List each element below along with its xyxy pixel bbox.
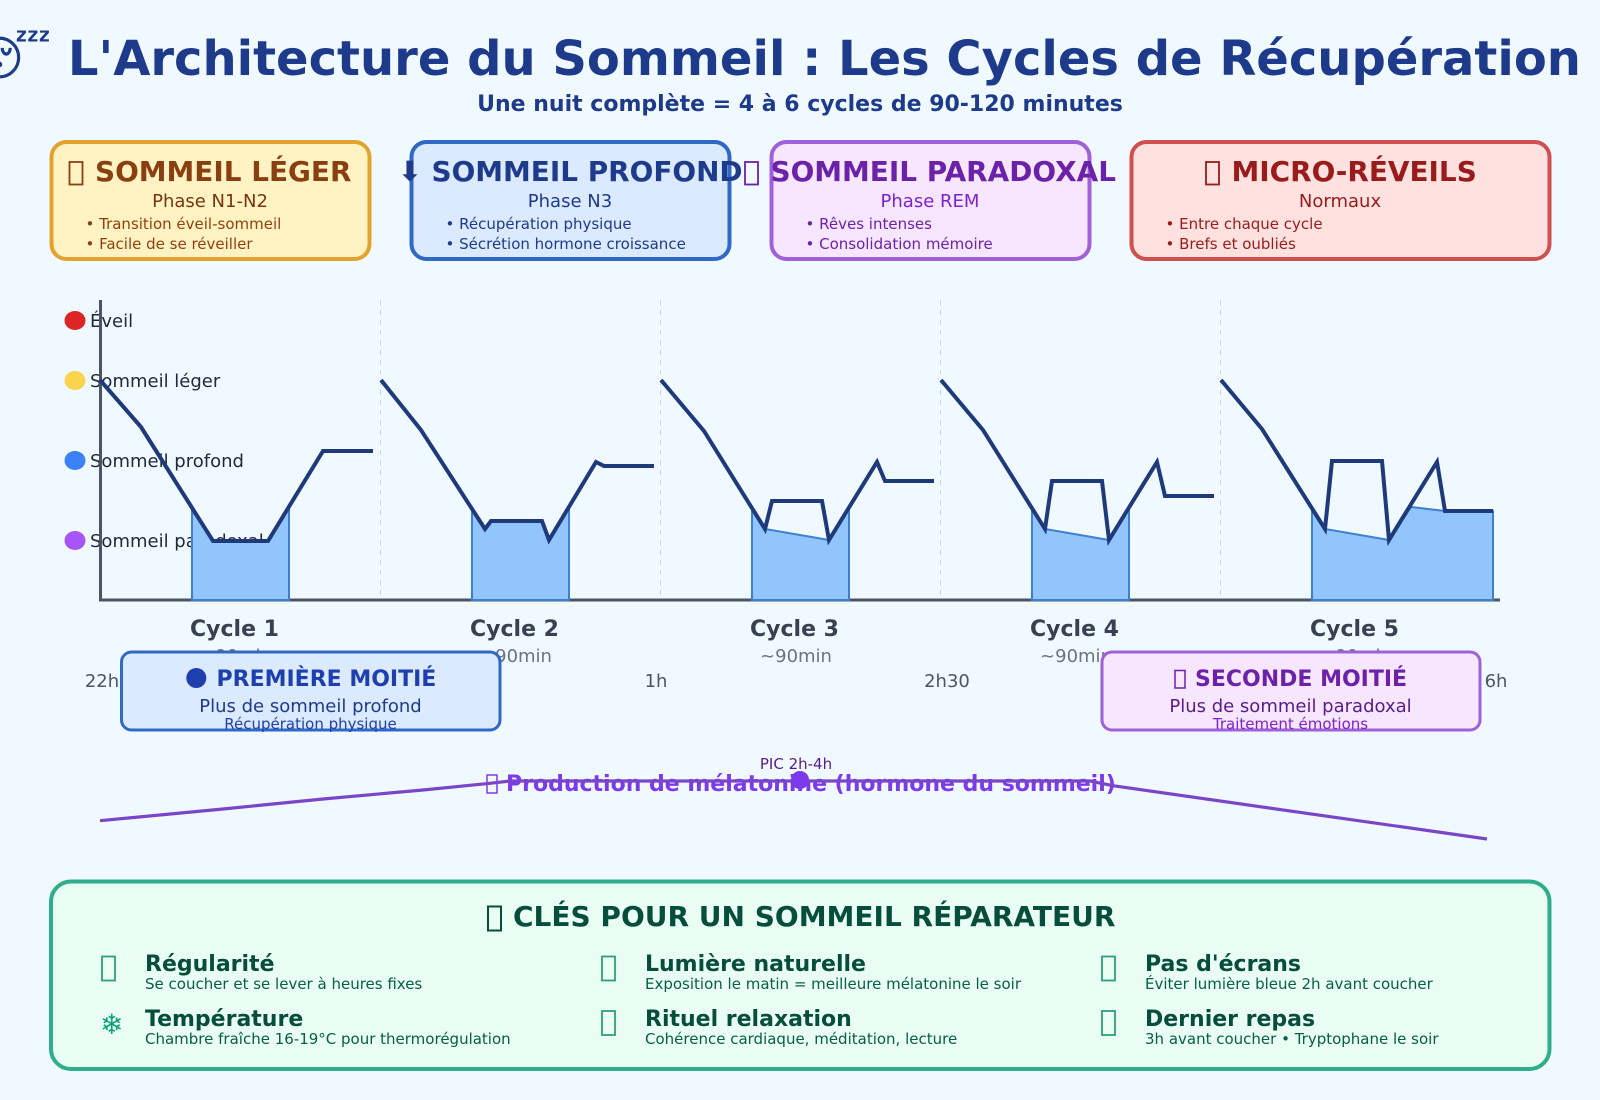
time axis labels: 6h xyxy=(1485,671,1507,692)
melatonin curve: PIC 2h-4h xyxy=(760,755,832,773)
bullets: profond: • Sécrétion hormone croissance xyxy=(446,235,686,253)
bullets: paradoxal: • Consolidation mémoire xyxy=(806,235,993,253)
cycle labels: ~90min xyxy=(1320,646,1392,667)
tip: température: ❄ xyxy=(100,1008,123,1041)
heading: sommeil paradoxal: SOMMEIL PARADOXAL xyxy=(770,155,1116,188)
tip: dernier repas xyxy=(1102,1007,1439,1048)
tip: dernier repas: Dernier repas xyxy=(1145,1007,1315,1032)
deep sleep areas xyxy=(192,505,1493,600)
cycle labels: Cycle 1 xyxy=(190,617,279,642)
legend: sleep stages: Éveil xyxy=(90,310,133,332)
cycle labels: ~90min xyxy=(1040,646,1112,667)
title: 😴 L'Architecture du Sommeil : Les Cycles de Récupération xyxy=(0,30,1581,87)
cycle labels xyxy=(190,617,1399,667)
phase: normaux: Normaux xyxy=(1299,191,1381,212)
heading: clés: CLÉS POUR UN SOMMEIL RÉPARATEUR xyxy=(513,899,1115,933)
phase: N1-N2: Phase N1-N2 xyxy=(152,191,268,212)
tip: température: Température xyxy=(145,1007,303,1032)
phase: REM: Phase REM xyxy=(881,191,979,212)
callout: première moitié xyxy=(122,652,500,733)
heading: première moitié: PREMIÈRE MOITIÉ xyxy=(216,666,436,692)
tip: régularité xyxy=(102,952,422,993)
sleep cycle lines xyxy=(100,380,1493,541)
bullets: léger: • Transition éveil-sommeil xyxy=(86,215,281,233)
tip: régularité: Régularité xyxy=(145,952,274,977)
legend: sleep stages xyxy=(64,310,264,552)
time axis labels: 22h xyxy=(85,671,119,692)
tip: rituel relaxation: Cohérence cardiaque, méditation, lecture xyxy=(645,1030,957,1048)
tip: régularité: Se coucher et se lever à heures fixes xyxy=(145,975,422,993)
bullets: léger xyxy=(86,215,281,253)
callout: seconde moitié: Plus de sommeil paradoxal xyxy=(1169,696,1412,717)
tip: pas d'écrans: Éviter lumière bleue 2h avant coucher xyxy=(1145,974,1434,993)
heading: sommeil léger: SOMMEIL LÉGER xyxy=(95,154,351,188)
melatonin curve: Production de mélatonine (hormone du sommeil) xyxy=(506,772,1116,797)
legend: sleep stages: Sommeil paradoxal xyxy=(90,531,264,552)
cycle labels: ~90min xyxy=(480,646,552,667)
heading: micro-réveils: MICRO-RÉVEILS xyxy=(1232,154,1477,188)
tip: lumière naturelle: Lumière naturelle xyxy=(645,952,866,977)
heading: seconde moitié: SECONDE MOITIÉ xyxy=(1195,666,1407,692)
subtitle: Une nuit complète = 4 à 6 cycles de 90-120 minutes xyxy=(477,92,1123,117)
chart: hypnogram xyxy=(64,300,1500,600)
tip: pas d'écrans: Pas d'écrans xyxy=(1145,952,1301,977)
panel: sommeil paradoxal xyxy=(745,142,1116,259)
tip: rituel relaxation xyxy=(602,1007,957,1048)
panel: sommeil profond xyxy=(398,142,743,259)
cycle labels: ~90min xyxy=(200,646,272,667)
bullets: paradoxal xyxy=(806,215,993,253)
tip: lumière naturelle xyxy=(602,952,1022,993)
time axis labels: 1h xyxy=(645,671,667,692)
time axis labels xyxy=(85,671,1507,692)
panel: clés pour un sommeil réparateur xyxy=(51,882,1550,1069)
bullets: profond: • Récupération physique xyxy=(446,215,632,233)
cycle labels: Cycle 2 xyxy=(470,617,559,642)
cycle labels: Cycle 5 xyxy=(1310,617,1399,642)
bullets: léger: • Facile de se réveiller xyxy=(86,235,253,253)
melatonin curve xyxy=(100,755,1487,839)
callout: seconde moitié: Traitement émotions xyxy=(1212,715,1368,733)
legend: sleep stages: Sommeil léger xyxy=(90,371,221,392)
callout: première moitié: Récupération physique xyxy=(224,715,397,733)
callout: seconde moitié xyxy=(1102,652,1480,733)
panel: micro-réveils xyxy=(1132,142,1550,259)
tip: pas d'écrans xyxy=(1102,952,1434,993)
tip: température xyxy=(100,1007,511,1048)
callout: première moitié: Plus de sommeil profond xyxy=(199,696,422,717)
tip: dernier repas: 3h avant coucher • Tryptophane le soir xyxy=(1145,1030,1439,1048)
panel: sommeil léger xyxy=(52,142,370,259)
cycle labels: ~90min xyxy=(760,646,832,667)
heading: sommeil profond: ⬇ SOMMEIL PROFOND xyxy=(398,155,743,188)
bullets: micro-réveils xyxy=(1166,215,1323,253)
legend: sleep stages: Sommeil profond xyxy=(90,451,244,472)
cycle labels: Cycle 3 xyxy=(750,617,839,642)
cycle labels: Cycle 4 xyxy=(1030,617,1119,642)
phase: N3: Phase N3 xyxy=(528,191,612,212)
axes xyxy=(100,300,1500,600)
bullets: paradoxal: • Rêves intenses xyxy=(806,215,932,233)
tip: température: Chambre fraîche 16-19°C pour thermorégulation xyxy=(145,1030,511,1048)
tip: rituel relaxation: Rituel relaxation xyxy=(645,1007,852,1032)
tip: lumière naturelle: Exposition le matin = meilleure mélatonine le soir xyxy=(645,975,1022,993)
bullets: micro-réveils: • Brefs et oubliés xyxy=(1166,235,1296,253)
bullets: profond xyxy=(446,215,686,253)
time axis labels: 2h30 xyxy=(924,671,970,692)
bullets: micro-réveils: • Entre chaque cycle xyxy=(1166,215,1323,233)
